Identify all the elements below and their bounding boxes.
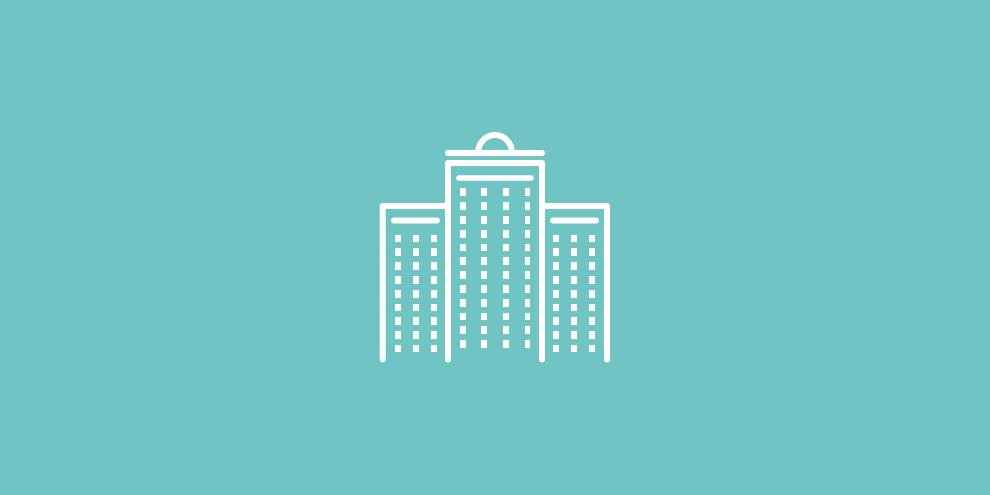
- right building top bar: [553, 218, 596, 224]
- left building top bar: [394, 218, 437, 224]
- right building windows: [553, 235, 595, 352]
- dome and roof bar: [448, 135, 542, 153]
- center building top bar: [459, 175, 531, 181]
- center building windows: [460, 188, 530, 348]
- left building outline: [383, 206, 448, 360]
- center building outline: [448, 163, 542, 360]
- right building outline: [542, 206, 607, 360]
- left building windows: [395, 235, 437, 352]
